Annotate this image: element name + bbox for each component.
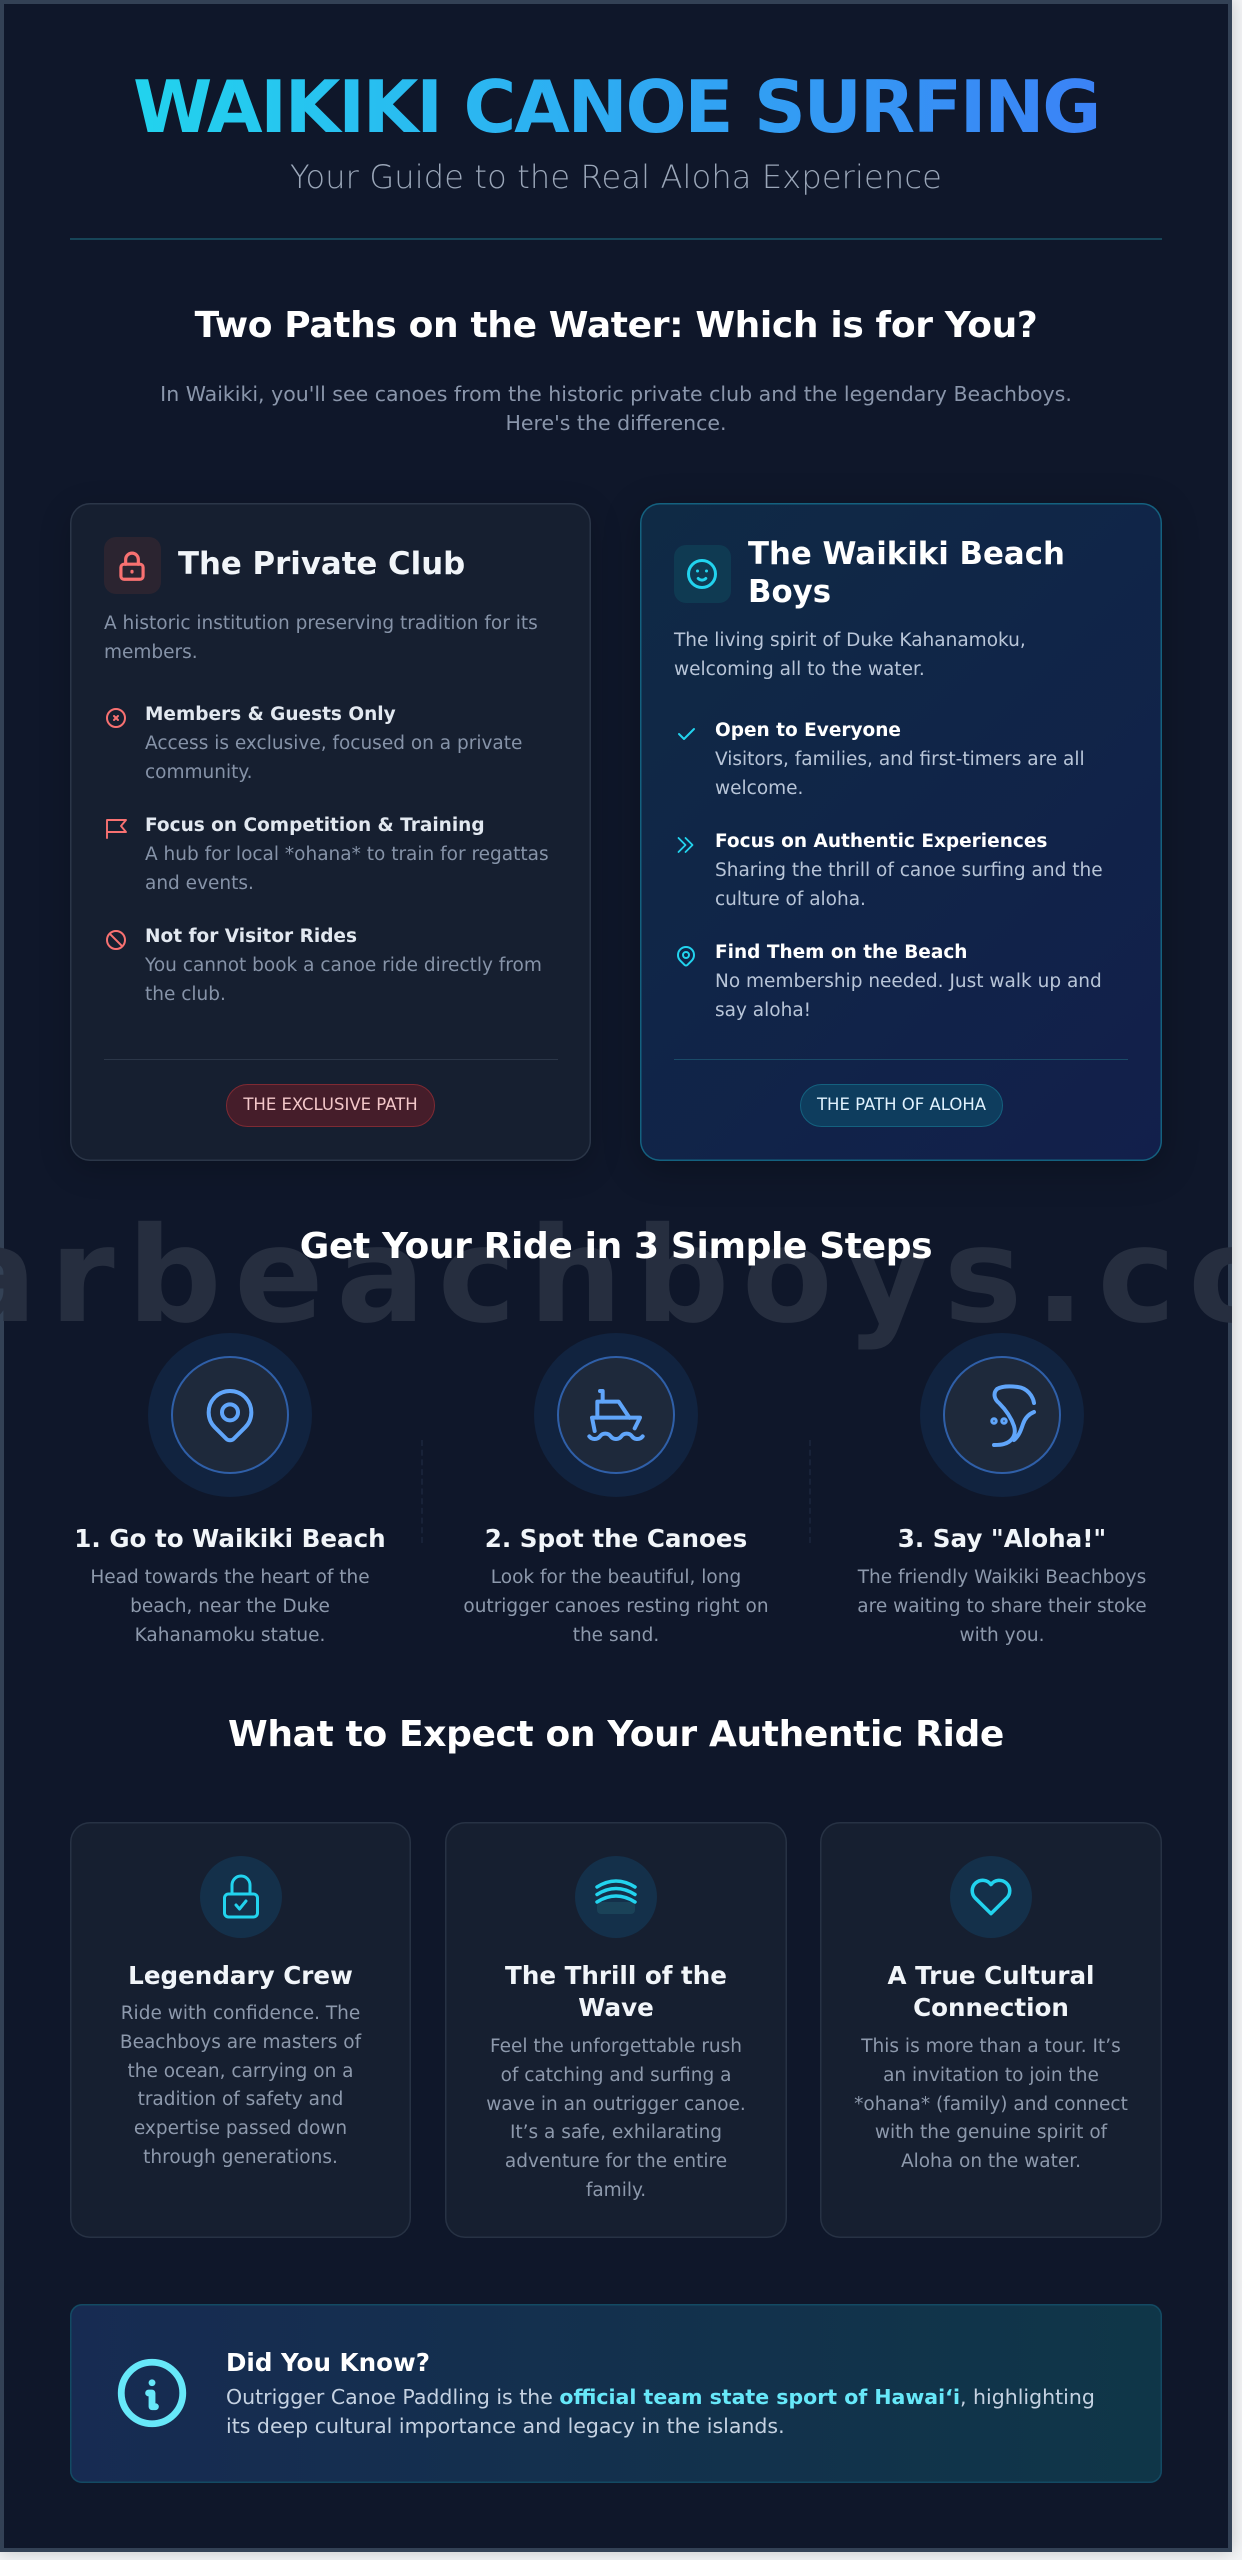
- item text: [145, 704, 522, 783]
- callout text: [226, 2385, 1095, 2438]
- intro text: Here's the difference.: [505, 411, 727, 435]
- feature description: tradition of safety and: [138, 2089, 343, 2110]
- feature title: [505, 1961, 727, 2022]
- feature title: Wave: [578, 1993, 654, 2022]
- item text: Members & Guests Only: [145, 704, 396, 725]
- callout heading: Did You Know?: [226, 2348, 430, 2377]
- icon: chevrons right: [678, 837, 694, 853]
- panel description: welcoming all to the water.: [674, 659, 925, 680]
- item text: [715, 942, 1102, 1021]
- step title: 3. Say "Aloha!": [898, 1524, 1106, 1553]
- item text: You cannot book a canoe ride directly from: [145, 955, 542, 976]
- subtitle: Your Guide to the Real Aloha Experience: [290, 158, 942, 196]
- item text: Focus on Authentic Experiences: [715, 831, 1047, 852]
- callout: did you know: [70, 2304, 1162, 2483]
- step title: 1. Go to Waikiki Beach: [74, 1524, 386, 1553]
- feature description: an invitation to join the: [883, 2065, 1099, 2086]
- tag: the path of aloha: THE PATH OF ALOHA: [817, 1095, 986, 1114]
- feature description: through generations.: [143, 2147, 338, 2168]
- feature description: This is more than a tour. It’s: [861, 2036, 1121, 2057]
- icon: map pin: [677, 946, 695, 966]
- feature description: Feel the unforgettable rush: [490, 2036, 742, 2057]
- panel description: A historic institution preserving tradition for its: [104, 613, 538, 634]
- feature title: [888, 1961, 1094, 2022]
- tag: the exclusive path: [226, 1084, 435, 1127]
- tag: the exclusive path: THE EXCLUSIVE PATH: [243, 1095, 418, 1114]
- panel heading: The Waikiki Beach: [748, 536, 1065, 572]
- feature title: Legendary Crew: [128, 1961, 353, 1990]
- feature description: of catching and surfing a: [501, 2065, 731, 2086]
- item text: Visitors, families, and first-timers are all: [715, 749, 1085, 770]
- icon: lock with check: [200, 1856, 282, 1938]
- step description: the sand.: [573, 1625, 659, 1646]
- item text: Focus on Competition & Training: [145, 815, 485, 836]
- step description: beach, near the Duke: [130, 1596, 330, 1617]
- step description: Look for the beautiful, long: [491, 1567, 741, 1588]
- feature title: The Thrill of the: [505, 1961, 727, 1990]
- step description: are waiting to share their stoke: [857, 1596, 1147, 1617]
- feature description: *ohana* (family) and connect: [854, 2094, 1128, 2115]
- step 2: [463, 1333, 769, 1646]
- item text: welcome.: [715, 778, 803, 799]
- feature card: cultural connection: [820, 1822, 1162, 2238]
- icon: shaka hand: [943, 1356, 1061, 1474]
- step description: Kahanamoku statue.: [135, 1625, 325, 1646]
- item text: [715, 720, 1085, 799]
- step description: [90, 1567, 370, 1646]
- feature title: Connection: [913, 1993, 1069, 2022]
- list item: authentic experiences: [678, 831, 1103, 910]
- title: WAIKIKI CANOE SURFING: [133, 65, 1099, 149]
- item text: Find Them on the Beach: [715, 942, 967, 963]
- item text: [715, 831, 1103, 910]
- feature description: expertise passed down: [134, 2118, 347, 2139]
- heading: two paths: Two Paths on the Water: Which is for You?: [195, 305, 1037, 346]
- item text: community.: [145, 762, 253, 783]
- item text: the club.: [145, 984, 226, 1005]
- icon: lock: [104, 537, 161, 594]
- feature description: adventure for the entire: [505, 2151, 727, 2172]
- icon: flag: [106, 819, 127, 839]
- feature description: [854, 2036, 1128, 2172]
- item text: Not for Visitor Rides: [145, 926, 357, 947]
- intro text: In Waikiki, you'll see canoes from the historic private club and the legendary Beachboys.: [160, 382, 1072, 406]
- panel description: The living spirit of Duke Kahanamoku,: [674, 630, 1026, 651]
- step description: with you.: [959, 1625, 1044, 1646]
- list item: open to everyone: [678, 720, 1085, 799]
- tag: the path of aloha: [800, 1084, 1003, 1127]
- icon: circle x: [106, 708, 126, 728]
- heading: what to expect: What to Expect on Your Authentic Ride: [228, 1714, 1004, 1755]
- icon: smile: [674, 545, 731, 603]
- icon: info: [118, 2358, 186, 2428]
- step description: [463, 1567, 769, 1646]
- step description: [857, 1567, 1147, 1646]
- item text: A hub for local *ohana* to train for regattas: [145, 844, 549, 865]
- panel description: [674, 630, 1026, 680]
- item text: Access is exclusive, focused on a private: [145, 733, 522, 754]
- icon: check: [678, 728, 695, 740]
- feature description: Beachboys are masters of: [120, 2032, 361, 2053]
- callout text: its deep cultural importance and legacy in the islands.: [226, 2414, 785, 2438]
- item text: culture of aloha.: [715, 889, 866, 910]
- icon: ship: [557, 1356, 675, 1474]
- item text: say aloha!: [715, 1000, 811, 1021]
- header divider: [70, 238, 1162, 240]
- icon: map pin: [171, 1356, 289, 1474]
- panel: the private club: [70, 503, 591, 1161]
- feature description: It’s a safe, exhilarating: [510, 2122, 722, 2143]
- heading: steps: Get Your Ride in 3 Simple Steps: [300, 1226, 932, 1267]
- intro text: [160, 382, 1072, 435]
- feature description: Ride with confidence. The: [121, 2003, 360, 2024]
- step 3: [857, 1333, 1147, 1646]
- icon: ban: [106, 930, 126, 950]
- list item: competition: [106, 815, 549, 894]
- icon: waves: [575, 1856, 657, 1938]
- item text: Open to Everyone: [715, 720, 901, 741]
- feature description: wave in an outrigger canoe.: [486, 2094, 746, 2115]
- item text: [145, 926, 542, 1005]
- feature description: with the genuine spirit of: [875, 2122, 1107, 2143]
- panel description: members.: [104, 642, 198, 663]
- panel heading: [748, 536, 1065, 610]
- list item: find them: [677, 942, 1102, 1021]
- feature description: Aloha on the water.: [901, 2151, 1081, 2172]
- feature description: family.: [586, 2180, 646, 2201]
- step description: Head towards the heart of the: [90, 1567, 370, 1588]
- feature description: [486, 2036, 746, 2201]
- panel heading: The Private Club: [178, 546, 465, 582]
- step 1: [74, 1333, 386, 1646]
- callout text: Outrigger Canoe Paddling is the official team state sport of Hawaiʻi, highlighting: [226, 2385, 1095, 2409]
- step description: The friendly Waikiki Beachboys: [858, 1567, 1146, 1588]
- feature card: thrill of the wave: [445, 1822, 787, 2238]
- icon: heart: [950, 1856, 1032, 1938]
- list item: members: [106, 704, 522, 783]
- feature title: A True Cultural: [888, 1961, 1094, 1990]
- panel: the waikiki beach boys: [640, 503, 1162, 1161]
- step title: 2. Spot the Canoes: [485, 1524, 747, 1553]
- feature card: legendary crew: [70, 1822, 411, 2238]
- feature description: the ocean, carrying on a: [127, 2061, 354, 2082]
- list item: no visitor rides: [106, 926, 542, 1005]
- item text: [145, 815, 549, 894]
- panel description: [104, 613, 538, 663]
- step description: outrigger canoes resting right on: [463, 1596, 769, 1617]
- feature description: [120, 2003, 362, 2168]
- item text: No membership needed. Just walk up and: [715, 971, 1102, 992]
- item text: Sharing the thrill of canoe surfing and the: [715, 860, 1103, 881]
- panel heading: Boys: [748, 574, 831, 610]
- item text: and events.: [145, 873, 254, 894]
